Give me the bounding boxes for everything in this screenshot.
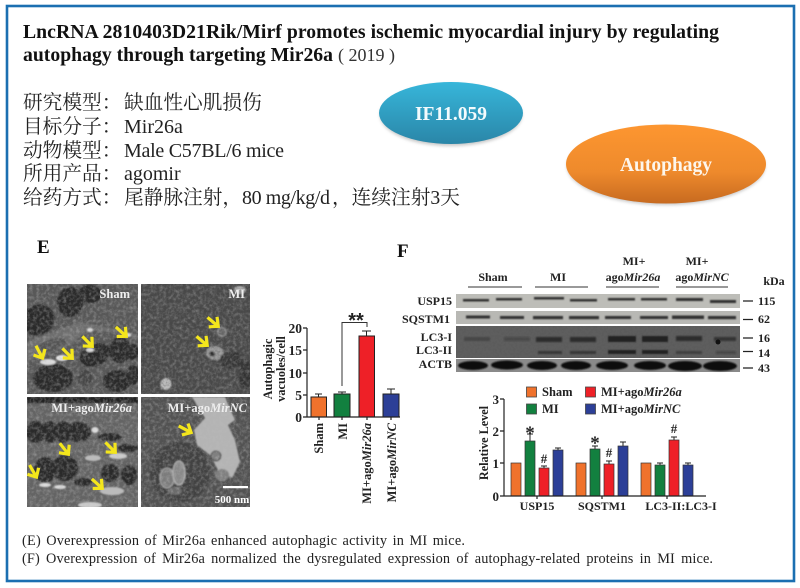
protein labels: USP15: [417, 294, 452, 308]
figure caption: [22, 533, 713, 567]
micrograph: MI: [141, 284, 253, 394]
micrograph labels: MI+agoMirNC: [168, 401, 248, 415]
study info text block: 目标分子：: [23, 116, 121, 138]
scale bar: 500 nm: [215, 494, 249, 506]
autophagy ellipse badge: [566, 124, 766, 205]
molecular weight markers: 16: [758, 331, 770, 345]
bar chart: relative protein level: [477, 385, 717, 513]
legend: MI+agoMir26a: [601, 385, 682, 399]
x tick labels: MI+agoMir26a: [360, 423, 374, 504]
yellow arrows: [24, 312, 222, 493]
protein labels: SQSTM1: [402, 312, 450, 326]
impact factor ellipse badge: IF11.059: [415, 104, 487, 125]
group headers: MI+: [686, 254, 709, 268]
y tick labels: 10: [288, 366, 302, 381]
molecular weight markers: 115: [758, 294, 775, 308]
group headers: kDa: [763, 274, 785, 288]
micrograph labels: Sham: [99, 287, 131, 301]
molecular weight markers: 14: [758, 346, 770, 360]
error bars: [527, 434, 691, 468]
group headers: MI+: [623, 254, 646, 268]
micrograph: MI+agoMirNC: [141, 397, 250, 507]
study info text block: 所用产品：: [23, 163, 121, 185]
micrograph: MI+agoMir26a: [26, 397, 138, 508]
x tick labels: MI: [336, 423, 350, 440]
protein labels: ACTB: [419, 357, 452, 371]
study info text block: 尾静脉注射，: [124, 187, 242, 209]
blot: SQSTM1: [456, 311, 740, 324]
significance bracket: [342, 310, 367, 386]
study info text block: 研究模型：: [23, 92, 121, 114]
autophagy ellipse badge: Autophagy: [620, 155, 712, 176]
molecular weight markers: [743, 294, 775, 375]
scale bar: [215, 486, 249, 506]
study info text block: 缺血性心肌损伤: [124, 92, 262, 114]
study info text block: agomir: [124, 163, 181, 185]
panel letter E: E: [37, 237, 50, 258]
y axis title: Relative Level: [477, 405, 491, 480]
significance marks: #: [671, 421, 678, 436]
bars: [311, 331, 399, 417]
x category labels: [520, 499, 717, 513]
panel letter F: F: [397, 241, 409, 262]
y axis title: vacuoles/cell: [274, 336, 288, 402]
micrograph labels: MI+agoMir26a: [51, 401, 132, 415]
study info text block: 给药方式：: [23, 187, 121, 209]
blot: USP15: [456, 294, 740, 308]
y tick labels: 0: [492, 489, 499, 504]
significance marks: [525, 421, 678, 466]
significance marks: *: [525, 423, 535, 444]
study info text block: ，连续注射3天: [332, 187, 460, 209]
legend: MI: [542, 402, 559, 416]
impact factor ellipse badge: [379, 82, 523, 146]
title: LncRNA 2810403D21Rik/Mirf promotes ischemic myocardial injury by regulating: [23, 21, 719, 43]
study info text block: Mir26a: [124, 116, 183, 138]
y tick labels: 0: [295, 410, 302, 425]
x category labels: LC3-II:LC3-I: [645, 499, 717, 513]
x category labels: USP15: [520, 499, 554, 513]
study info text block: Male C57BL/6 mice: [124, 140, 284, 162]
panel E: electron micrographs: [16, 284, 253, 508]
blot: ACTB: [456, 359, 740, 372]
study info text block: 80 mg/kg/d: [242, 187, 330, 209]
legend: Sham: [542, 385, 573, 399]
blot: LC3: [456, 326, 740, 358]
axes: [303, 328, 400, 420]
y tick labels: 15: [288, 343, 302, 358]
bar chart: autophagic vacuoles per cell: [261, 310, 400, 504]
figure caption: (E) Overexpression of Mir26a enhanced autophagic activity in MI mice.: [22, 533, 465, 549]
group headers: Sham: [478, 270, 508, 284]
protein labels: LC3-I: [421, 330, 452, 344]
study info text block: [23, 92, 460, 209]
y tick labels: 20: [288, 321, 302, 336]
x tick labels: MI+agoMirNC: [385, 422, 399, 502]
significance bracket: **: [348, 310, 364, 332]
panel F: western blot: [402, 254, 785, 375]
title: autophagy through targeting Mir26a: [23, 44, 333, 66]
protein labels: LC3-II: [416, 343, 452, 357]
title: ( 2019 ): [338, 45, 395, 66]
group headers: [478, 254, 785, 288]
y tick labels: 5: [295, 388, 302, 403]
molecular weight markers: 43: [758, 361, 770, 375]
group headers: agoMirNC: [675, 270, 730, 284]
group headers: agoMir26a: [606, 270, 660, 284]
title: [23, 21, 719, 66]
legend: MI+agoMirNC: [601, 402, 681, 416]
significance marks: #: [606, 445, 613, 460]
significance marks: *: [590, 433, 600, 454]
micrograph labels: [51, 287, 248, 415]
y axis title: Autophagic: [261, 338, 275, 399]
bars: [511, 440, 693, 496]
legend: [526, 385, 682, 416]
x category labels: SQSTM1: [578, 499, 626, 513]
y tick labels: [288, 321, 302, 425]
micrograph labels: MI: [228, 287, 245, 301]
y tick labels: [492, 392, 500, 504]
micrograph: Sham: [16, 284, 139, 394]
molecular weight markers: 62: [758, 312, 770, 326]
y axis title: [261, 336, 288, 402]
y tick labels: 1: [492, 456, 499, 471]
y tick labels: 2: [492, 424, 499, 439]
figure caption: (F) Overexpression of Mir26a normalized the dysregulated expression of autophagy-related proteins in MI mice.: [22, 551, 713, 567]
group headers: MI: [550, 270, 566, 284]
study info text block: 动物模型：: [23, 140, 121, 162]
significance marks: #: [541, 451, 548, 466]
axes: [500, 399, 706, 499]
x tick labels: [312, 422, 399, 504]
y tick labels: 3: [492, 392, 500, 407]
x tick labels: Sham: [312, 422, 326, 454]
protein labels: [402, 294, 452, 371]
